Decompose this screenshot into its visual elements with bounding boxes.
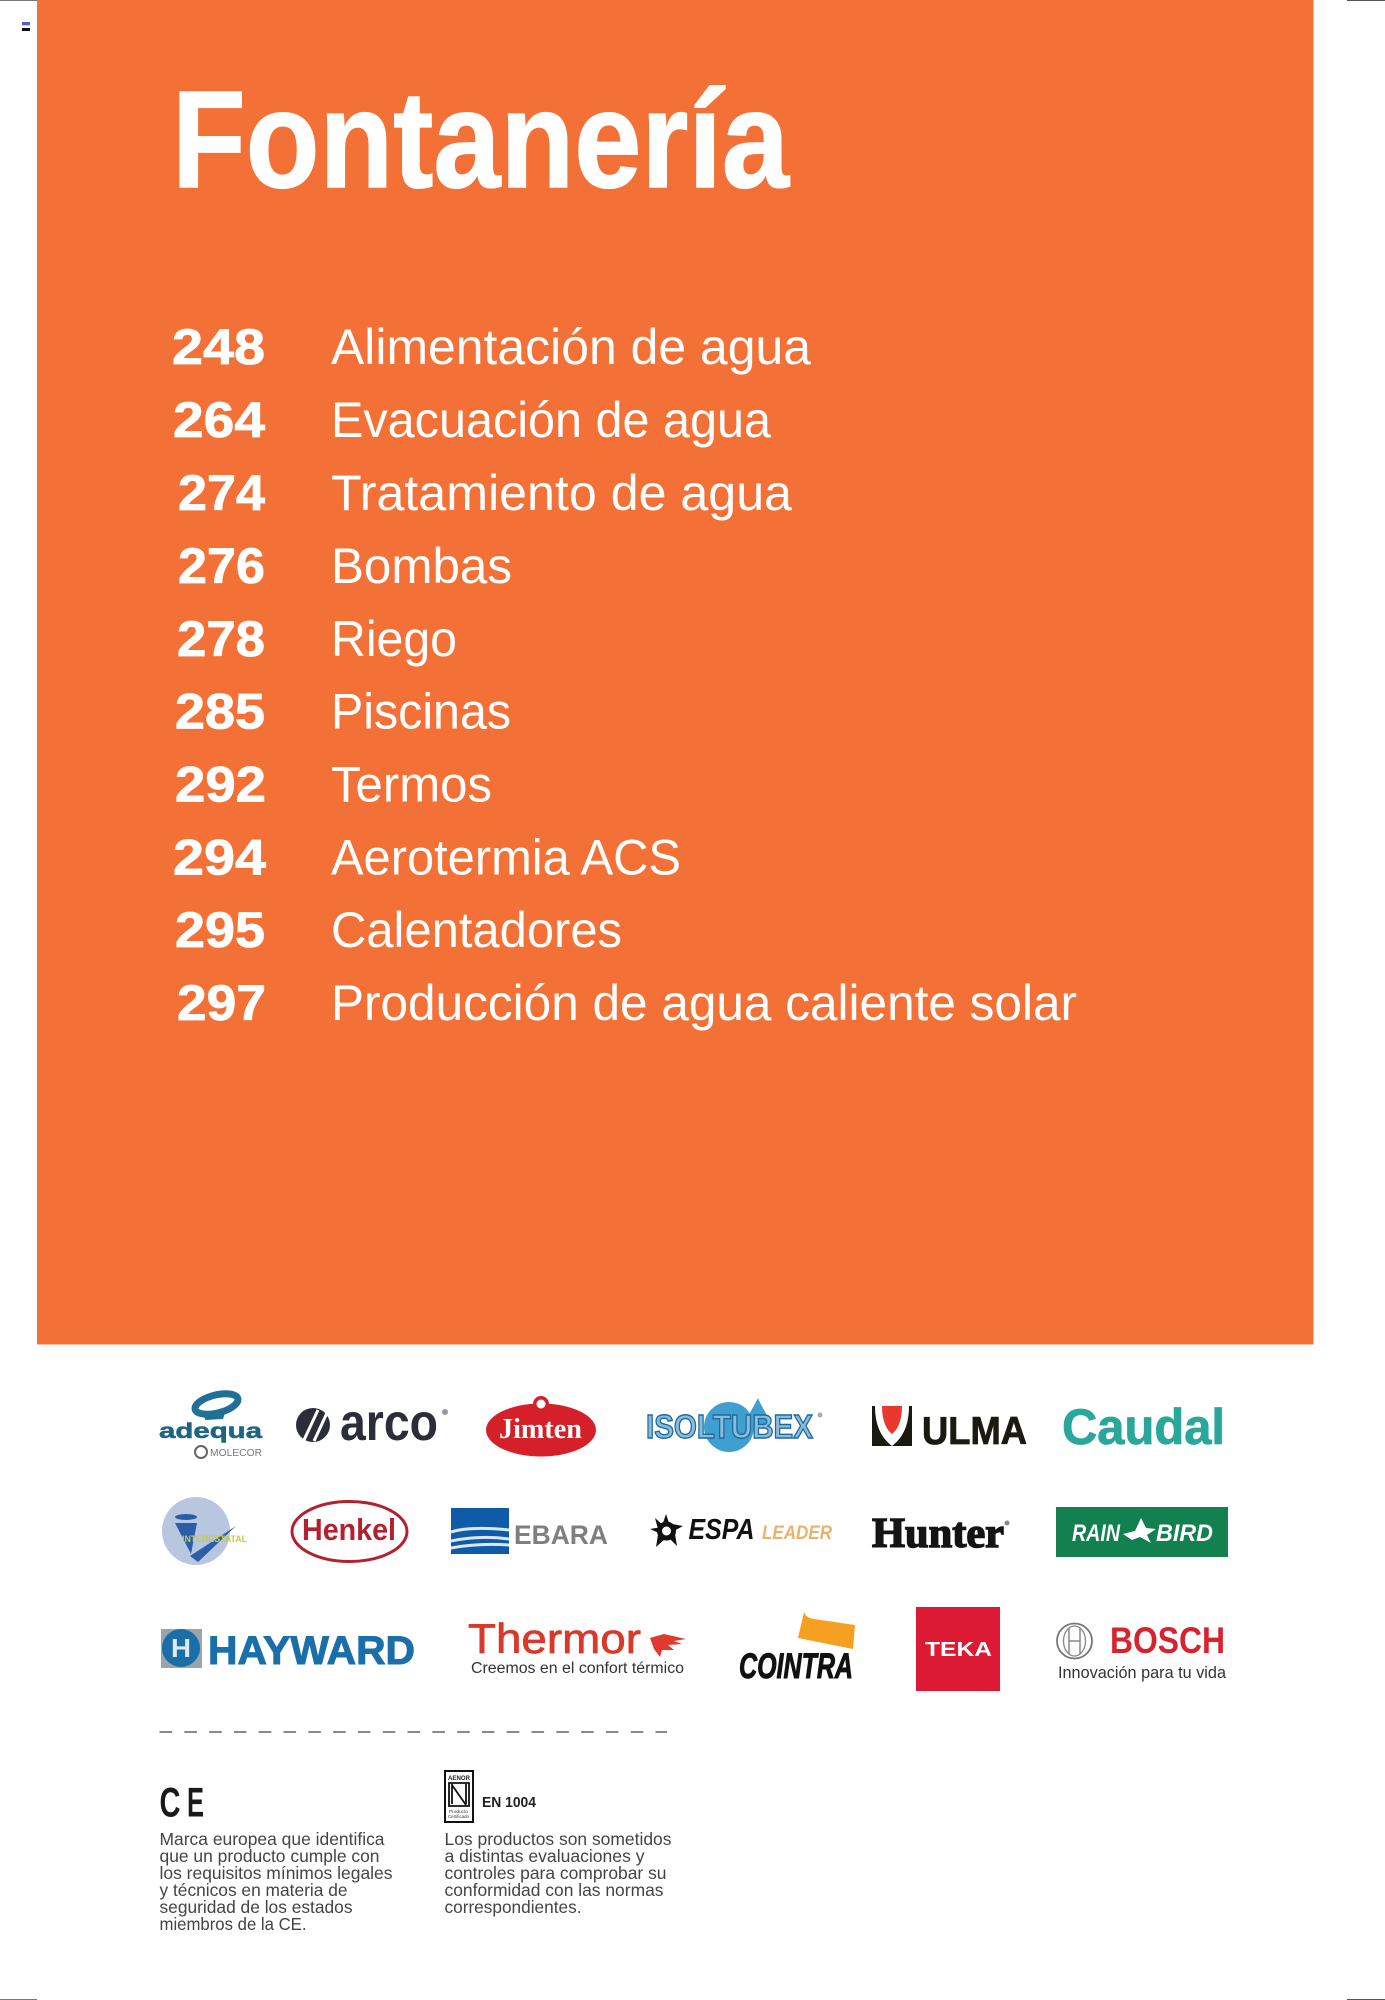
text block: CE description: miembros de la CE. xyxy=(160,1914,306,1934)
row: 276: 276 xyxy=(178,538,265,594)
row: 294 xyxy=(173,830,681,886)
logo: Bosch: Innovación para tu vida xyxy=(1058,1664,1227,1682)
icon: AENOR badge xyxy=(445,1771,473,1822)
row: 278: 278 xyxy=(177,611,265,667)
row: 295: 295 xyxy=(175,902,265,958)
row: 292: Termos xyxy=(331,756,492,812)
row: 295: Calentadores xyxy=(331,902,622,958)
logo: Interestatal badge xyxy=(162,1497,247,1565)
text block: AENOR description: conformidad con las normas xyxy=(444,1880,664,1900)
logo: Rain Bird xyxy=(1056,1507,1228,1557)
title: Fontanería xyxy=(172,63,790,217)
logo: Interestatal badge: INTERESTATAL xyxy=(182,1534,247,1544)
logo: ESPA Leader: ESPA xyxy=(688,1514,754,1546)
logo: Bosch: BOSCH xyxy=(1110,1620,1225,1661)
text block: CE description: Marca europea que identifica xyxy=(160,1829,385,1849)
logo: Rain Bird: BIRD xyxy=(1156,1520,1213,1547)
logo: Thermor xyxy=(468,1615,686,1677)
row: 248: 248 xyxy=(172,319,265,375)
logo: ESPA Leader: LEADER xyxy=(762,1523,832,1544)
text block: AENOR description: a distintas evaluaciones y xyxy=(444,1846,645,1866)
logo: Teka xyxy=(916,1607,1000,1691)
logo: adequa: MOLECOR xyxy=(210,1448,262,1459)
logo: Cointra: COINTRA xyxy=(739,1647,853,1686)
row: 274: Tratamiento de agua xyxy=(331,465,792,521)
logo: Jimten xyxy=(486,1396,596,1456)
text block: CE description: que un producto cumple con xyxy=(160,1846,380,1866)
row: 292 xyxy=(175,756,492,812)
icon: CE mark: C xyxy=(160,1778,180,1826)
logo: adequa: adequa xyxy=(159,1420,262,1443)
row: 278: Riego xyxy=(331,611,457,667)
logo: Thermor: Creemos en el confort térmico xyxy=(471,1660,684,1677)
label: EN 1004: EN 1004 xyxy=(482,1795,536,1811)
logo: EBARA: EBARA xyxy=(514,1520,608,1550)
row: 278 xyxy=(177,611,457,667)
icon: printer colour mark xyxy=(22,22,30,31)
logo: Isoltubex xyxy=(646,1398,822,1452)
row: 297: 297 xyxy=(177,975,266,1031)
row: 285: Piscinas xyxy=(331,684,511,740)
logo: ESPA Leader xyxy=(650,1514,832,1547)
logo: Henkel xyxy=(292,1502,407,1562)
row: 274: 274 xyxy=(178,465,265,521)
panel: orange contents xyxy=(37,0,1314,1344)
text block: CE description xyxy=(160,1829,393,1934)
logo: Teka: TEKA xyxy=(925,1639,992,1661)
logo: Hunter: Hunter xyxy=(872,1511,1004,1557)
logo: Caudal: Caudal xyxy=(1062,1399,1225,1455)
text block: AENOR description: Los productos son sometidos xyxy=(444,1829,672,1849)
text block: CE description: seguridad de los estados xyxy=(160,1897,353,1917)
logo: arco: arco xyxy=(340,1394,438,1452)
row: 276: Bombas xyxy=(331,538,512,594)
row: 276 xyxy=(178,538,512,594)
contents list xyxy=(172,319,1077,1031)
row: 248: Alimentación de agua xyxy=(331,319,811,375)
logo: Thermor: Thermor xyxy=(468,1615,641,1662)
logo: EBARA xyxy=(451,1508,608,1554)
row: 297: Producción de agua caliente solar xyxy=(331,975,1077,1031)
icon: AENOR badge: AENOR xyxy=(448,1775,470,1782)
row: 264: 264 xyxy=(173,392,265,448)
logo: ULMA xyxy=(872,1406,1027,1453)
row: 285: 285 xyxy=(175,684,265,740)
row: 294: Aerotermia ACS xyxy=(331,830,681,886)
icon: AENOR badge: Certificado xyxy=(448,1814,469,1819)
icon: CE mark xyxy=(160,1778,204,1826)
logo: Bosch xyxy=(1057,1620,1227,1682)
icon: AENOR badge: Producto xyxy=(449,1809,469,1814)
logo: Isoltubex: ISOLTUBEX xyxy=(646,1408,813,1445)
text block: AENOR description: controles para comprobar su xyxy=(444,1863,666,1883)
logo: Jimten: Jimten xyxy=(499,1414,582,1445)
logo: Hayward: HAYWARD xyxy=(208,1629,415,1673)
certification: AENOR EN 1004 xyxy=(444,1771,672,1917)
icon: CE mark: E xyxy=(187,1778,204,1826)
text block: CE description: los requisitos mínimos legales xyxy=(160,1863,393,1883)
logo: ULMA: ULMA xyxy=(922,1410,1027,1453)
row: 264: Evacuación de agua xyxy=(331,392,771,448)
logo: adequa xyxy=(159,1390,262,1459)
logo: Henkel: Henkel xyxy=(302,1512,396,1547)
logo: Hayward: H xyxy=(171,1633,191,1663)
row: 295 xyxy=(175,902,622,958)
text block: AENOR description xyxy=(444,1829,672,1917)
certification: CE xyxy=(160,1778,393,1934)
text block: AENOR description: correspondientes. xyxy=(444,1897,582,1917)
logo: Rain Bird: RAIN xyxy=(1072,1520,1121,1547)
row: 292: 292 xyxy=(175,756,266,812)
row: 285 xyxy=(175,684,511,740)
text block: CE description: y técnicos en materia de xyxy=(160,1880,348,1900)
logo: Cointra xyxy=(739,1612,855,1686)
row: 294: 294 xyxy=(173,830,266,886)
